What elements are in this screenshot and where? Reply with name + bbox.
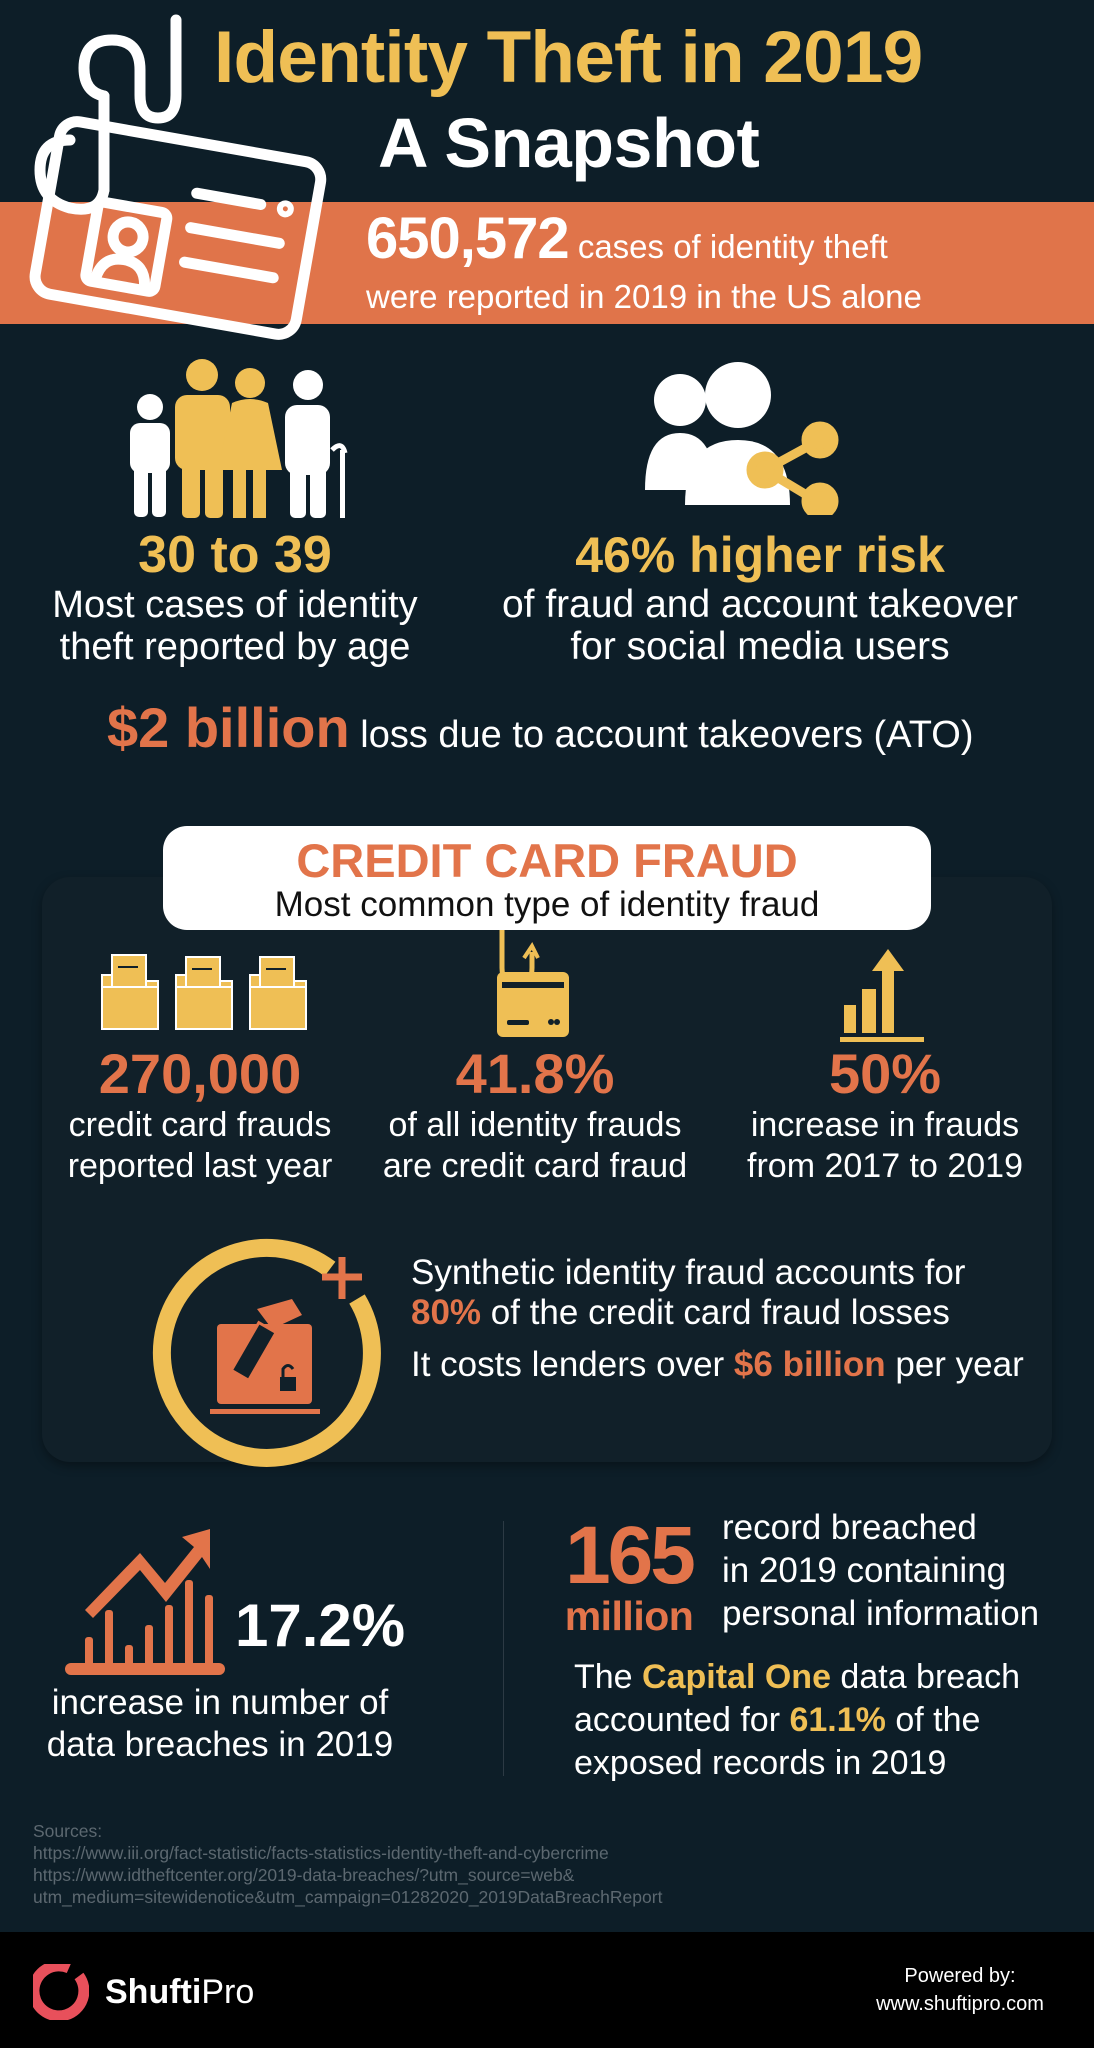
stat: 270,000: credit card frauds	[69, 1106, 331, 1144]
icon: growth bars	[840, 949, 924, 1042]
divider	[503, 1521, 504, 1776]
icon: folders	[101, 954, 307, 1030]
text: record breached	[722, 1508, 977, 1547]
text: personal information	[722, 1594, 1039, 1633]
sources: utm_medium=sitewidenotice&utm_campaign=01282020_2019DataBreachReport	[33, 1887, 662, 1907]
stat: 270,000	[68, 1042, 332, 1185]
panel header: credit card fraud	[163, 826, 931, 930]
stat: 41.8%	[383, 1042, 687, 1185]
sources: https://www.idtheftcenter.org/2019-data-breaches/?utm_source=web&	[33, 1865, 574, 1885]
text: data breaches in 2019	[47, 1725, 393, 1764]
stat: 50%: 50%	[829, 1042, 941, 1105]
banner text: 650,572 cases of identity theft	[366, 206, 888, 271]
text: in 2019 containing	[722, 1551, 1006, 1590]
icon: synthetic identity ring	[152, 1238, 381, 1467]
sources: https://www.iii.org/fact-statistic/facts-statistics-identity-theft-and-cybercrime	[33, 1843, 609, 1863]
stat: 165 million: 165	[565, 1510, 693, 1601]
stat: 41.8%: 41.8%	[456, 1042, 614, 1105]
sources	[33, 1821, 662, 1907]
subtitle: A Snapshot	[378, 104, 759, 182]
powered by: Powered by:	[904, 1965, 1016, 1987]
icon: rising chart	[65, 1529, 225, 1675]
icon: family	[130, 359, 348, 518]
stat: age: 30 to 39	[138, 526, 332, 584]
stat: 165 million: million	[565, 1593, 693, 1639]
sources: Sources:	[33, 1821, 102, 1841]
banner text	[366, 206, 922, 315]
banner text: were reported in 2019 in the US alone	[366, 278, 922, 315]
Capital One text	[574, 1658, 1020, 1782]
stat: 50%: from 2017 to 2019	[747, 1147, 1023, 1185]
stat: 17.2%: 17.2%	[235, 1592, 405, 1659]
icon: hooked card	[497, 930, 569, 1037]
stat: 270,000: reported last year	[68, 1147, 332, 1185]
stat: social media risk: for social media users	[570, 625, 950, 668]
stat: 41.8%: are credit card fraud	[383, 1147, 687, 1185]
panel: credit card fraud	[42, 877, 1052, 1462]
text: increase in number of	[52, 1683, 388, 1722]
synthetic identity text: Synthetic identity fraud accounts for	[411, 1253, 965, 1292]
stat: 50%: increase in frauds	[751, 1106, 1019, 1144]
Capital One text: The Capital One data breach	[574, 1658, 1020, 1696]
stat: 41.8%: of all identity frauds	[389, 1106, 681, 1144]
synthetic identity text: 80% of the credit card fraud losses	[411, 1293, 950, 1332]
orange banner	[0, 202, 1094, 324]
Capital One text: accounted for 61.1% of the	[574, 1701, 980, 1739]
stat: social media risk: 46% higher risk	[575, 527, 945, 583]
powered by: www.shuftipro.com	[876, 1993, 1044, 2015]
Capital One text: exposed records in 2019	[574, 1744, 946, 1782]
logo: ShuftiPro	[105, 1973, 254, 2011]
synthetic identity text	[411, 1253, 1024, 1384]
logo	[33, 1964, 254, 2020]
footer	[0, 1932, 1094, 2048]
synthetic identity text: It costs lenders over $6 billion per year	[411, 1345, 1024, 1384]
title: Identity Theft in 2019	[214, 17, 922, 98]
stat: age: Most cases of identity	[52, 584, 418, 626]
powered by	[876, 1965, 1044, 2015]
stat: age	[52, 526, 418, 668]
icon: hooked ID card	[30, 14, 326, 340]
stat: social media risk: of fraud and account takeover	[502, 583, 1018, 626]
stat: social media risk	[502, 527, 1018, 668]
panel header: credit card fraud: Most common type of identity fraud	[275, 885, 819, 924]
icon: social users share	[645, 362, 838, 515]
stat: age: theft reported by age	[60, 626, 410, 668]
stat: 165 million	[565, 1510, 694, 1639]
stat: ATO loss: $2 billion loss due to account takeovers (ATO)	[107, 696, 973, 759]
stat: 270,000: 270,000	[99, 1042, 301, 1105]
stat: 50%	[747, 1042, 1023, 1185]
panel header: credit card fraud: CREDIT CARD FRAUD	[296, 834, 798, 887]
